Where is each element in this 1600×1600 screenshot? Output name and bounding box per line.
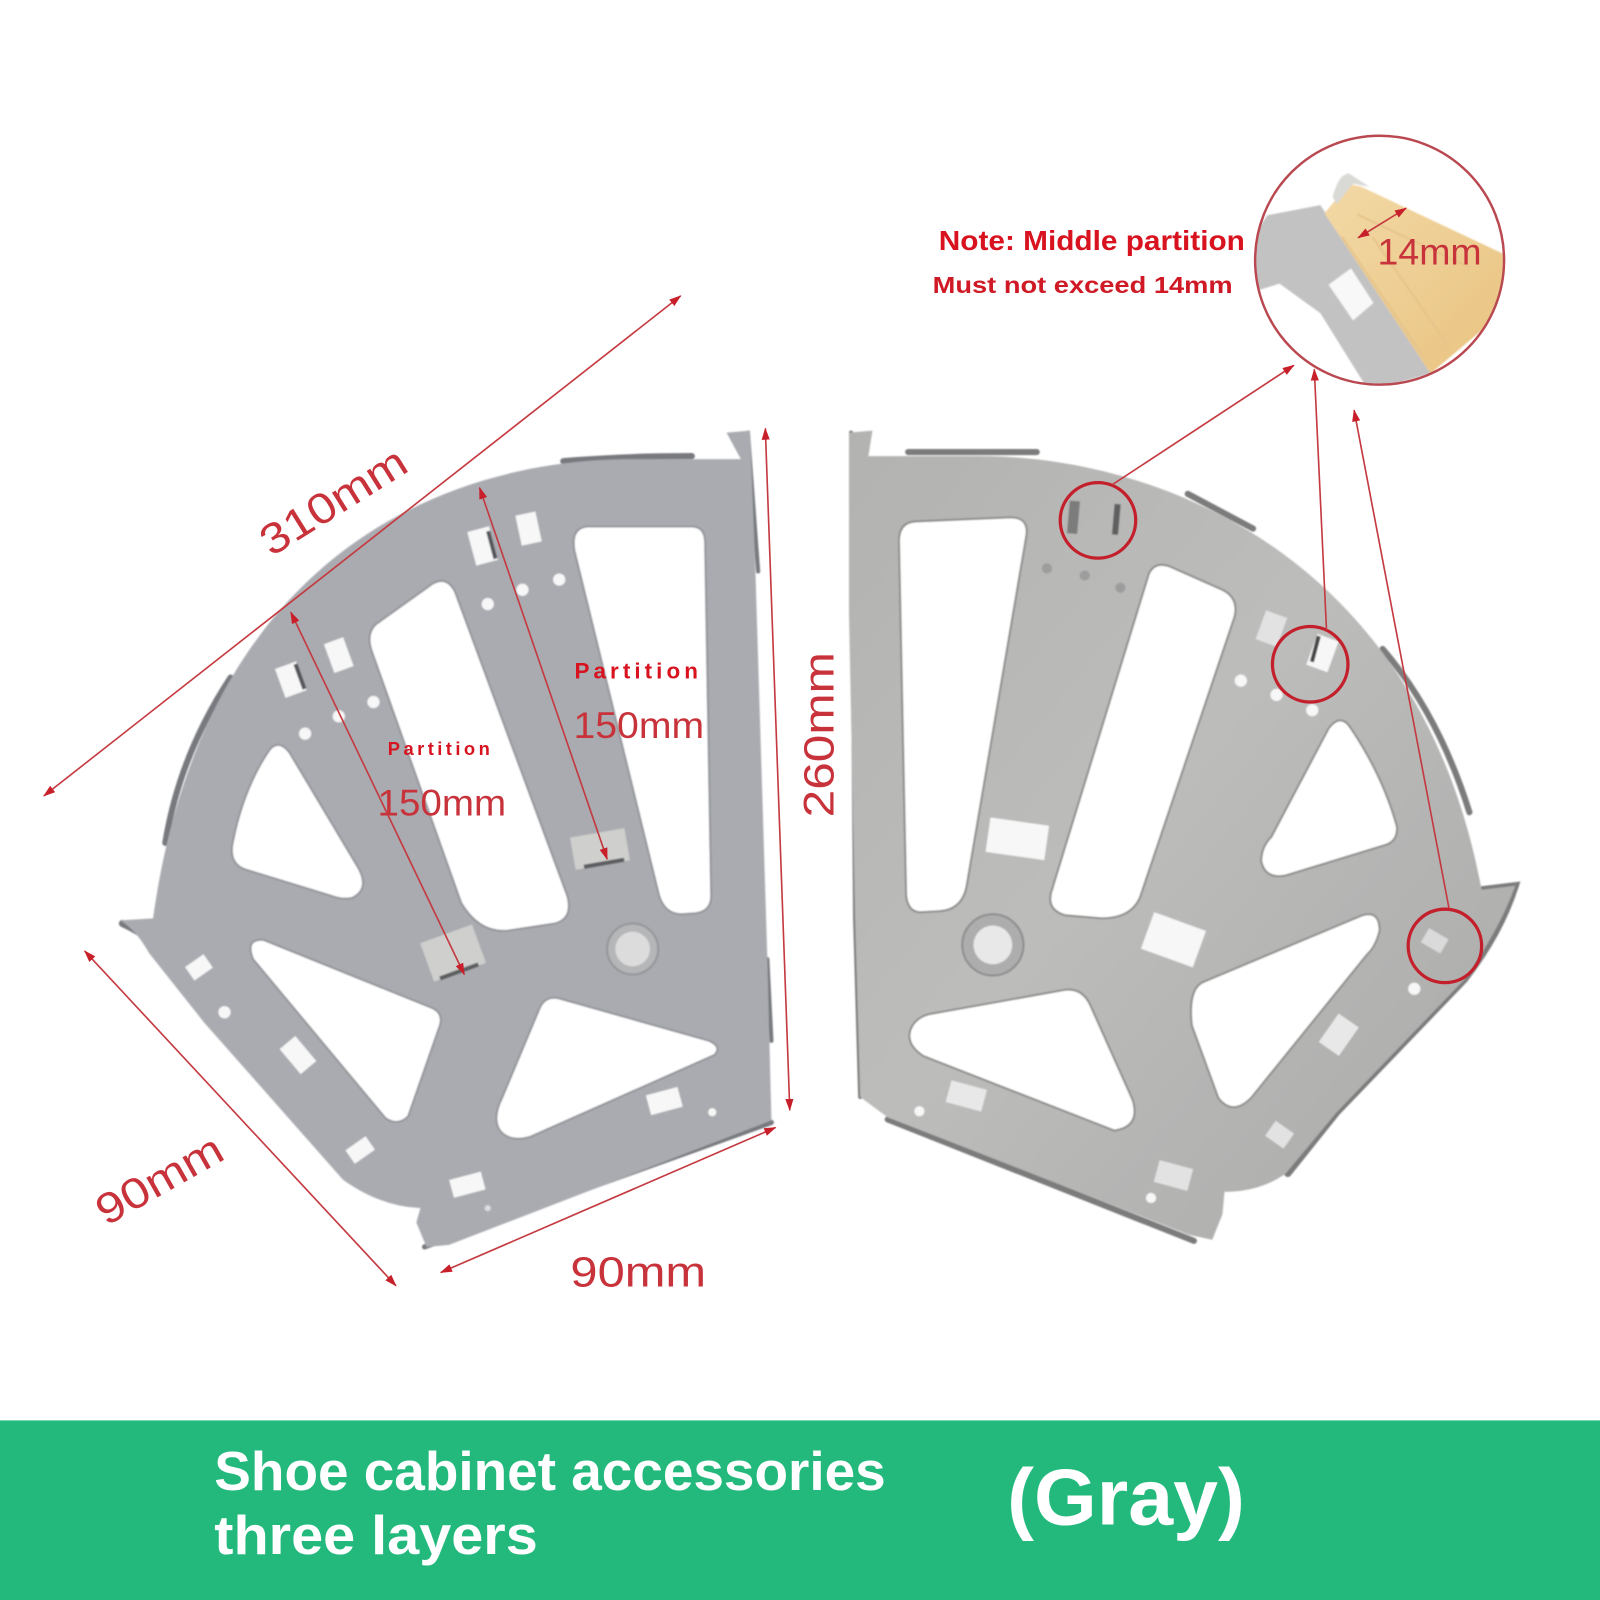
right plate slots and holes xyxy=(914,501,1448,1203)
left plate rim shadows xyxy=(122,433,771,1247)
highlight circle: top slots xyxy=(1060,483,1136,558)
right gray bracket plate xyxy=(849,431,1515,1241)
bottom green title band xyxy=(0,1420,1600,1600)
note: middle partition limit: Must not exceed 14mm xyxy=(933,272,1233,298)
detail circle: wood partition in bracket xyxy=(1253,136,1510,392)
dimension arrow: bottom 90mm xyxy=(441,1128,776,1272)
right plate cut-outs xyxy=(899,517,1397,1131)
note: middle partition limit xyxy=(933,225,1245,298)
14mm label: 14mm xyxy=(1378,231,1482,272)
dimension label: bottom 90mm: 90mm xyxy=(570,1249,706,1297)
dimension label: left 90mm: 90mm xyxy=(87,1125,232,1235)
note: middle partition limit: Note: Middle partition xyxy=(939,225,1245,256)
lens contents xyxy=(1253,173,1510,392)
title line 2: three layers xyxy=(214,1504,538,1566)
highlight circle: middle slot xyxy=(1272,627,1348,702)
dimension arrow: 310mm xyxy=(44,296,681,796)
left plate cut-outs xyxy=(232,527,717,1139)
callout arrow: lower slot to detail xyxy=(1354,410,1449,908)
colour label: (Gray) xyxy=(1007,1452,1245,1541)
dimension arrow: partition 150mm right xyxy=(480,488,607,859)
label: partition left: Partition xyxy=(388,738,490,759)
callout arrow: top slots to detail xyxy=(1112,365,1294,485)
left plate body xyxy=(120,431,771,1247)
title line 1: Shoe cabinet accessories xyxy=(214,1440,886,1502)
dimension label: 260mm: 260mm xyxy=(796,652,844,817)
label: 150mm right: 150mm xyxy=(573,705,704,746)
callout arrow: middle slot to detail xyxy=(1314,369,1327,631)
dimension label: 310mm: 310mm xyxy=(251,438,416,566)
partition thickness arrow xyxy=(1358,208,1406,238)
left gray bracket plate xyxy=(120,431,771,1247)
left plate slots and holes xyxy=(185,511,716,1211)
label: 150mm left: 150mm xyxy=(378,782,506,823)
dimension arrow: left 90mm xyxy=(85,951,396,1286)
right plate rim shadows xyxy=(851,433,1515,1241)
right plate body xyxy=(849,431,1515,1240)
dimension arrow: partition 150mm left xyxy=(291,612,464,974)
dimension arrow: 260mm xyxy=(765,429,790,1110)
highlight circle: lower slot xyxy=(1408,909,1482,983)
label: partition right: Partition xyxy=(574,659,698,684)
